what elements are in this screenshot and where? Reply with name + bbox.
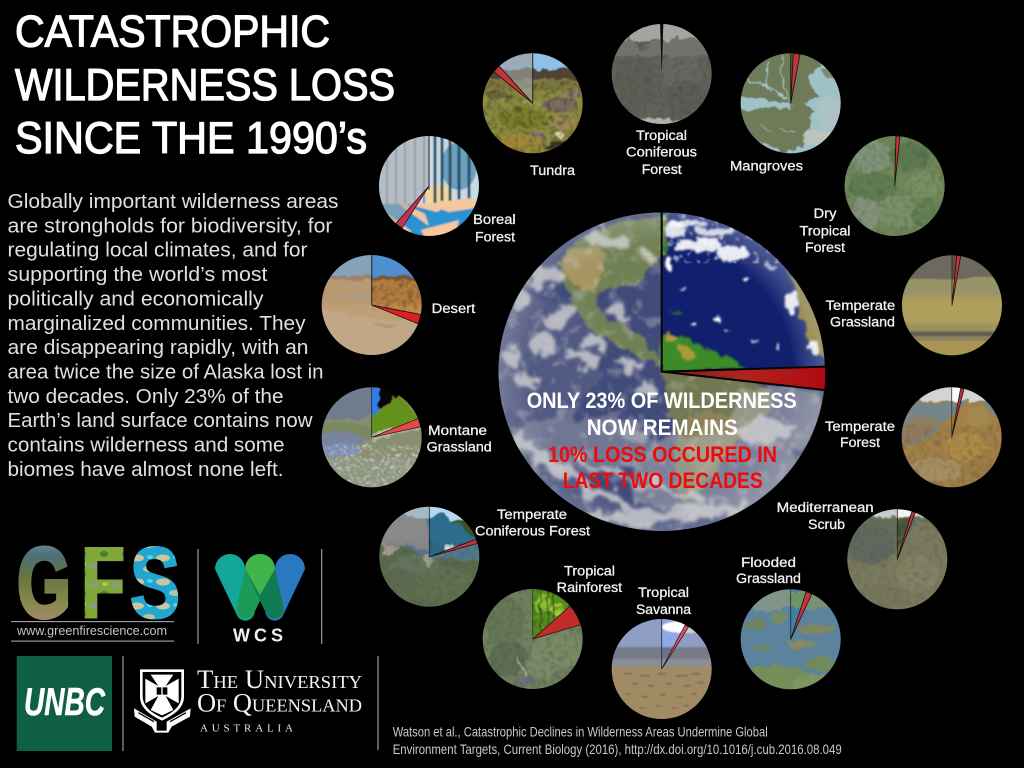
wedge line [951,387,953,437]
label: montane grassland [427,423,492,456]
label: tropical savanna [636,585,691,618]
label: boreal forest: Forest [475,230,515,246]
pie: tundra [482,53,583,154]
red wedge [396,186,429,228]
label: tropical rainforest: Tropical [564,564,615,580]
red wedge [662,625,689,669]
body text: are disappearing rapidly, with an [8,337,308,359]
body text: Globally important wilderness areas [8,191,338,213]
muted area [379,507,479,607]
wedge line [532,589,534,639]
photo: savanna herd [612,619,712,719]
label: temperate coniferous forest [475,507,590,540]
body text [8,191,338,481]
earth caption: ONLY 23% OF WILDERNESS [527,388,797,413]
clouds, wedge side [664,220,819,355]
earth image [490,210,830,533]
label: tropical savanna: Tropical [638,585,689,601]
red wedge [791,53,800,103]
red wedge [429,539,478,557]
label: tropical rainforest: Rainforest [557,580,622,596]
red wedge [952,388,964,437]
body text: politically and economically [8,288,264,310]
muted area [902,255,1002,355]
land masses [558,213,827,502]
label: mediterranean scrub: Mediterranean [777,500,874,516]
label: flooded grassland: Grassland [736,571,801,587]
muted area [847,509,947,609]
body text: area twice the size of Alaska lost in [8,362,324,384]
label: boreal forest [473,212,516,246]
title: WILDERNESS LOSS [15,61,395,110]
photo: mountains and conifers [379,506,480,607]
body text: supporting the world’s most [8,264,268,286]
wedge line [790,53,792,103]
muted area of earth [499,212,824,531]
label: mediterranean scrub [777,500,874,533]
pie: mediterranean scrub [847,509,948,610]
logo: WCS [215,554,305,646]
label: temperate forest: Forest [840,435,880,451]
pie: desert [322,255,422,355]
atmosphere rim [498,212,825,531]
wedge line [371,387,373,437]
wedge line [428,507,430,557]
photo: scrub hills [847,509,948,610]
label: temperate coniferous forest: Coniferous Forest [475,524,590,540]
earth caption: 10% LOSS OCCURED IN [548,442,777,467]
photo: autumn slope [902,387,1002,488]
muted area [612,619,712,719]
pie: mangroves [740,53,841,154]
logo: University of Queensland crest [134,669,191,733]
label: montane grassland: Montane [428,423,487,439]
wedge line [428,136,430,190]
red wedge [533,606,581,639]
muted area [844,136,944,236]
red wedge [791,592,812,639]
citation: Environment Targets, Current Biology (2016), http://dx.doi.org/10.1016/j.cub.2016.08.049 [393,741,842,757]
photo: misty forest [612,24,712,124]
earth caption: NOW REMAINS [587,415,738,440]
body text: biomes have almost none left. [8,459,284,481]
clouds, muted side [504,219,797,524]
muted area [483,589,583,689]
muted area [741,53,841,153]
wedge line [790,589,792,639]
pie: flooded grassland [740,589,841,690]
divider lines [123,549,378,751]
label: flooded grassland: Flooded [741,555,796,571]
label: temperate grassland [826,298,895,331]
red wedge [372,305,421,324]
label: tropical savanna: Savanna [636,602,691,618]
label: temperate grassland: Temperate [826,298,895,314]
logo: GFS: F [81,527,125,638]
logo: UNBC [17,656,112,751]
wispy cloud texture [493,210,827,533]
pie: temperate grassland [902,255,1002,356]
label: tropical coniferous forest: Forest [642,162,682,178]
pie: tropical coniferous forest [612,24,712,124]
wedge line [371,255,373,305]
body text: regulating local climates, and for [8,240,308,262]
pie: tropical savanna [612,619,712,719]
body text: contains wilderness and some [8,434,284,456]
photo: rainforest [482,589,583,689]
logo: University of Queensland wordmark [197,665,362,735]
label: dry tropical forest [800,206,850,256]
label: tropical coniferous forest: Coniferous [626,145,697,161]
body text: Earth’s land surface contains now [8,410,313,432]
red wedge [952,255,961,305]
photo: alpine lake and meadow [322,387,422,488]
label: boreal forest: Boreal [473,212,516,228]
logo: UNBC: UNBC [24,681,106,724]
label: mediterranean scrub: Scrub [808,517,845,533]
logo: WCS: WCS [233,626,283,646]
muted area [741,589,841,689]
muted area [901,387,1001,487]
muted area [499,53,533,103]
fine clouds in bright wedge [663,213,783,263]
red loss wedge [662,367,825,390]
title: SINCE THE 1990’s [15,114,367,163]
wedge line [896,509,898,559]
citation [393,724,842,757]
citation: Watson et al., Catastrophic Declines in Wilderness Areas Undermine Global [393,724,768,740]
earth globe pie [490,210,830,533]
label: tropical coniferous forest: Tropical [636,128,687,144]
logo: University of Queensland wordmark: Of Queensland [197,689,362,718]
label: flooded grassland [736,555,801,587]
muted area [322,255,418,355]
black sliver wedge [660,24,663,74]
logo: GFS: G [17,527,71,638]
photo: tundra [482,53,583,154]
label: tropical rainforest [557,564,622,596]
logo: GFS: www.greenfirescience.com [16,624,167,638]
label: desert: Desert [432,301,475,317]
label: temperate forest: Temperate [825,419,895,435]
title [15,8,395,163]
body text: are strongholds for biodiversity, for [8,215,333,237]
photo: mangrove delta [740,53,841,154]
wedge outline [662,212,825,390]
pie: temperate coniferous forest [379,506,480,607]
body text: marginalized communities. They [8,313,306,335]
wedge line [951,255,953,305]
muted area [612,24,712,124]
photo: grassland [902,255,1002,356]
red wedge [494,66,533,103]
photo: desert dunes [322,255,422,355]
muted area [379,136,429,223]
photo: snowy boreal forest [379,136,479,236]
body text: two decades. Only 23% of the [8,386,284,408]
title: CATASTROPHIC [15,8,330,57]
label: dry tropical forest: Forest [805,240,845,256]
label: temperate coniferous forest: Temperate [497,507,567,523]
pie: boreal forest [379,136,479,236]
pie: tropical rainforest [482,589,583,689]
label: temperate forest [825,419,895,451]
logo: University of Queensland wordmark: The University [197,665,362,694]
label: mangroves: Mangroves [730,159,803,175]
pie: dry tropical forest [844,136,945,236]
label: tundra: Tundra [530,163,575,179]
red wedge [897,512,915,559]
label: tropical coniferous forest [626,128,697,178]
logo: GFS: S [130,527,180,638]
logo: University of Queensland wordmark: AUSTRALIA [200,723,293,735]
red wedge [372,419,421,437]
label: montane grassland: Grassland [427,440,492,456]
logo: GFS [11,527,180,642]
photo: dry forest [844,136,945,236]
earth caption: LAST TWO DECADES [563,468,763,493]
label: temperate grassland: Grassland [830,315,895,331]
pie: temperate forest [902,387,1002,488]
label: dry tropical forest: Tropical [800,224,850,240]
earth caption [527,388,797,493]
red wedge [895,136,900,186]
muted area [322,387,422,487]
broad haze [490,297,830,520]
pie: montane grassland [322,387,422,488]
wedge line [532,53,534,103]
label: dry tropical forest: Dry [814,206,837,222]
wedge line [661,619,663,669]
photo: flooded plain [740,589,841,690]
